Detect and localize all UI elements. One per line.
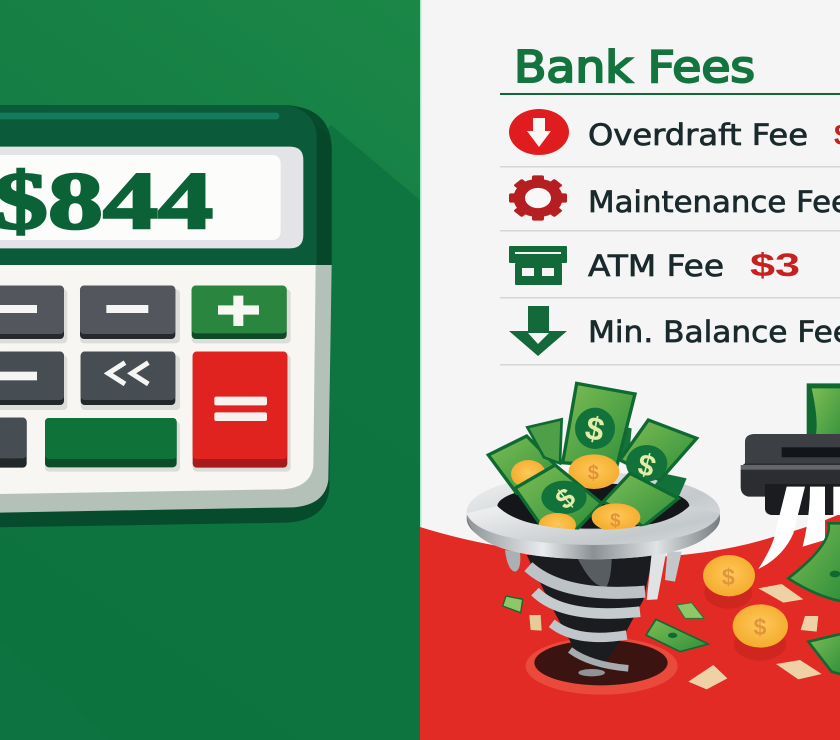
fee row: Overdraft Fee: Overdraft Fee	[588, 118, 808, 152]
fee row: ATM Fee	[509, 246, 800, 285]
keypad buttons	[0, 286, 291, 472]
fee row: ATM Fee: $3	[750, 247, 800, 283]
money in funnel: $	[582, 409, 608, 448]
money in funnel: $	[588, 462, 599, 484]
money in funnel: $	[610, 510, 621, 531]
panel: green calculator background	[0, 0, 420, 740]
drain hole	[526, 637, 678, 695]
panel: white fees background with red floor	[420, 0, 840, 740]
fee row: ATM Fee: ATM Fee	[588, 249, 724, 283]
shredded bills at right	[788, 523, 840, 675]
fee row: Min. Balance Fee	[509, 306, 840, 356]
fee row: Maintenance Fee	[509, 175, 840, 221]
fee row: Overdraft Fee	[509, 109, 840, 155]
money in funnel: $	[634, 446, 659, 483]
shredder	[741, 383, 840, 515]
funnel rim	[467, 472, 720, 559]
money in funnel: $	[550, 481, 582, 515]
funnel lip shadow band	[467, 514, 720, 559]
row dividers	[500, 166, 840, 366]
fallen coins	[703, 555, 788, 661]
fallen coins: $	[754, 614, 767, 640]
spiral drain	[505, 550, 682, 676]
calculator display	[0, 147, 303, 248]
illustration: money drain and shredder	[467, 383, 840, 695]
fallen coins: $	[722, 564, 735, 590]
fee row: Maintenance Fee: Maintenance Fee	[588, 185, 840, 219]
heading: Bank Fees: Bank Fees	[514, 42, 755, 93]
shredded paper strips	[758, 487, 840, 569]
funnel front lip	[467, 506, 720, 559]
fee row: Min. Balance Fee: Min. Balance Fee	[588, 315, 840, 349]
bill scraps on floor	[503, 584, 822, 689]
calculator	[0, 105, 332, 527]
heading rule	[500, 93, 840, 95]
money in funnel	[488, 383, 697, 537]
